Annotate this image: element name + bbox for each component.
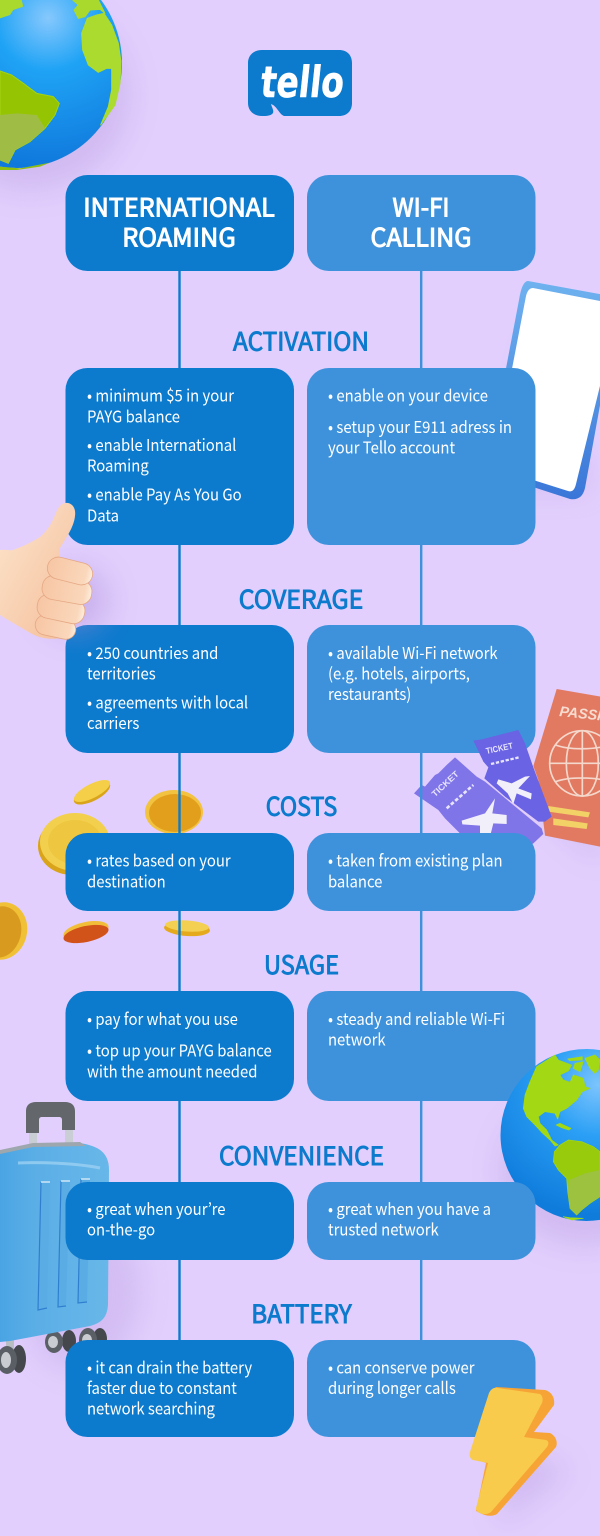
coins <box>0 776 210 965</box>
panel: convenience roaming: • great when your’re <box>87 1196 226 1220</box>
panel: activation wi-fi: • setup your E911 adress in <box>328 414 512 438</box>
panel: usage roaming: • top up your PAYG balance <box>87 1038 272 1062</box>
coin: red <box>62 917 110 947</box>
panel: coverage wi-fi: (e.g. hotels, airports, <box>328 661 470 685</box>
suitcase handle <box>26 1102 75 1150</box>
panel: activation roaming: PAYG balance <box>87 403 180 428</box>
connector line: wi-fi calling <box>420 270 422 1350</box>
panel: coverage roaming <box>66 625 294 753</box>
icon: passport <box>530 689 600 860</box>
connector overlay: wi-fi line over tickets <box>420 753 422 833</box>
panel: coverage roaming: carriers <box>87 710 139 734</box>
panel: coverage roaming: territories <box>87 661 156 685</box>
header: wi-fi calling: CALLING <box>370 218 472 254</box>
panel: usage roaming: with the amount needed <box>87 1058 257 1083</box>
connector line: international roaming <box>178 270 181 1350</box>
panel: battery roaming: network searching <box>87 1396 215 1420</box>
panel: usage wi-fi: network <box>328 1027 386 1051</box>
icon: globe right <box>500 1049 600 1245</box>
panel: costs wi-fi: balance <box>328 868 382 893</box>
panel: battery roaming: • it can drain the battery <box>87 1354 252 1379</box>
panel: convenience wi-fi: trusted network <box>328 1217 439 1241</box>
panel: activation roaming: Data <box>87 502 119 527</box>
ticket front: TICKET <box>430 768 461 799</box>
panel: activation wi-fi <box>307 368 536 545</box>
coin: gold <box>145 790 203 834</box>
heading: activation: ACTIVATION <box>233 322 369 358</box>
panel: usage roaming: • pay for what you use <box>87 1006 238 1030</box>
panel: convenience wi-fi <box>307 1182 536 1260</box>
header: wi-fi calling <box>307 175 536 271</box>
coin: small right <box>164 919 210 938</box>
heading: convenience: CONVENIENCE <box>219 1137 384 1173</box>
panel: costs roaming: • rates based on your <box>87 848 232 872</box>
panel: usage wi-fi: • steady and reliable Wi-Fi <box>328 1006 505 1030</box>
heading: usage: USAGE <box>264 946 339 982</box>
panel: coverage wi-fi <box>307 625 536 753</box>
icon: suitcase <box>0 1102 140 1374</box>
panel: convenience roaming: on-the-go <box>87 1217 155 1241</box>
heading: costs: COSTS <box>266 787 337 823</box>
panel: costs wi-fi <box>307 833 536 911</box>
logo: tello <box>248 50 352 116</box>
header: wi-fi calling: WI-FI <box>392 188 450 224</box>
panel: activation wi-fi: • enable on your device <box>328 383 488 407</box>
header: international roaming: INTERNATIONAL <box>83 188 275 224</box>
panel: activation wi-fi: your Tello account <box>328 435 455 459</box>
coin: small top <box>71 776 113 809</box>
panel: activation roaming: • enable International <box>87 432 236 456</box>
icon: thumbs up <box>0 503 110 641</box>
panel: usage roaming <box>66 991 294 1101</box>
panel: coverage wi-fi: • available Wi-Fi network <box>328 640 498 664</box>
ticket back: TICKET <box>485 740 514 756</box>
icon: tickets <box>414 730 552 847</box>
suitcase wheels <box>0 1328 107 1374</box>
panel: usage wi-fi <box>307 991 536 1101</box>
panel: convenience roaming <box>66 1182 294 1260</box>
panel: activation roaming: • minimum $5 in your <box>87 383 235 407</box>
header: international roaming: ROAMING <box>122 218 236 254</box>
logo: tello: tello <box>258 58 347 108</box>
icon: phone <box>500 281 600 499</box>
header: international roaming <box>66 175 294 271</box>
panel: battery wi-fi: during longer calls <box>328 1375 456 1399</box>
panel: costs roaming: destination <box>87 868 166 893</box>
coin: large yellow <box>38 813 110 875</box>
panel: activation roaming: Roaming <box>87 453 149 477</box>
panel: costs roaming <box>66 833 294 911</box>
panel: convenience wi-fi: • great when you have a <box>328 1196 491 1220</box>
coin: left edge <box>0 897 34 965</box>
panel: battery roaming <box>66 1340 294 1437</box>
panel: costs wi-fi: • taken from existing plan <box>328 848 503 872</box>
panel: battery wi-fi <box>307 1340 536 1437</box>
panel: coverage roaming: • agreements with local <box>87 690 248 714</box>
icon: globe top left <box>0 0 130 190</box>
icon: lightning bolt <box>470 1387 570 1525</box>
panel: activation roaming <box>66 368 294 545</box>
panel: activation roaming: • enable Pay As You Go <box>87 482 242 506</box>
panel: battery roaming: faster due to constant <box>87 1375 237 1399</box>
panel: battery wi-fi: • can conserve power <box>328 1354 475 1379</box>
panel: coverage wi-fi: restaurants) <box>328 681 411 705</box>
panel: coverage roaming: • 250 countries and <box>87 640 218 664</box>
heading: battery: BATTERY <box>251 1295 352 1331</box>
heading: coverage: COVERAGE <box>239 580 363 616</box>
